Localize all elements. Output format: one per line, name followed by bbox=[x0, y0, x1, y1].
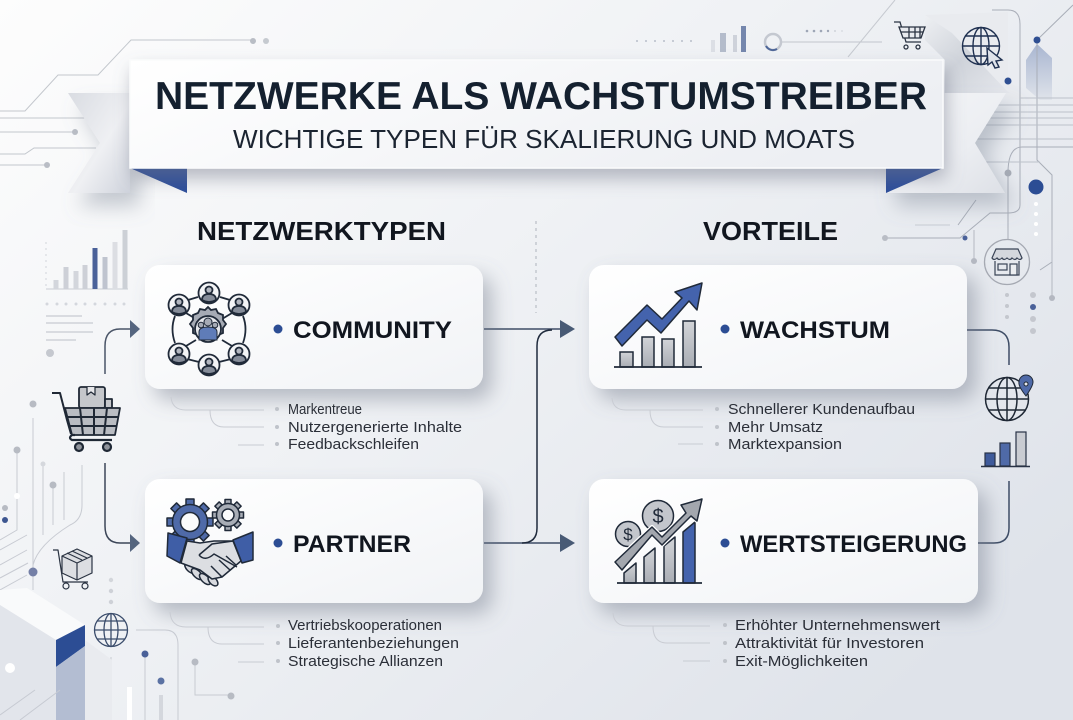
list: community: Markentreue bbox=[288, 401, 362, 418]
arrow: community to wachstum bbox=[484, 320, 575, 338]
list: wertsteigerung: Exit-Möglichkeiten bbox=[735, 653, 868, 670]
icon: bar chart right bbox=[981, 432, 1030, 466]
icon: globe with cursor bbox=[962, 28, 1002, 68]
list: partner: Strategische Allianzen bbox=[288, 653, 443, 670]
icon: store bbox=[984, 240, 1030, 284]
label: community: COMMUNITY bbox=[293, 317, 452, 344]
bullet bbox=[274, 324, 282, 334]
decoration: isometric block bbox=[0, 588, 112, 720]
connector: cart to community bbox=[105, 320, 140, 374]
icon: handshake with gears bbox=[167, 499, 253, 588]
connector: wertsteigerung to chart bbox=[978, 481, 1009, 543]
ribbon: left fold bbox=[68, 93, 130, 193]
decoration: lower-left circuit lines bbox=[0, 400, 234, 720]
list: partner: Lieferantenbeziehungen bbox=[288, 635, 459, 652]
decoration: right-side dots and lines bbox=[971, 230, 1055, 334]
title banner bbox=[130, 60, 943, 168]
list: wachstum: Marktexpansion bbox=[728, 436, 842, 453]
icon: shopping cart top right bbox=[894, 22, 925, 49]
label: wertsteigerung: WERTSTEIGERUNG bbox=[740, 531, 967, 558]
label: partner: PARTNER bbox=[293, 531, 411, 558]
list: community: Feedbackschleifen bbox=[288, 436, 419, 453]
list: wertsteigerung: Attraktivität für Investoren bbox=[735, 635, 924, 652]
list: partner bbox=[170, 612, 459, 670]
icon: growth chart bbox=[614, 283, 702, 367]
panel: wertsteigerung bbox=[589, 479, 978, 603]
title: NETZWERKE ALS WACHSTUMSTREIBER bbox=[155, 75, 927, 118]
panel: wachstum bbox=[589, 265, 967, 389]
icon: community network bbox=[168, 282, 250, 376]
icon: value growth: $ bbox=[623, 525, 633, 544]
bullet bbox=[720, 538, 730, 548]
list: wertsteigerung bbox=[613, 613, 941, 670]
connector: partner to wachstum bbox=[522, 330, 552, 543]
list: wachstum bbox=[612, 398, 915, 453]
centre dotted divider bbox=[535, 221, 537, 313]
ribbon: right fold bbox=[886, 93, 1006, 193]
connector: cart to partner bbox=[105, 463, 140, 552]
list: wertsteigerung: Erhöhter Unternehmenswert bbox=[735, 617, 941, 634]
arrow: partner to wertsteigerung bbox=[484, 534, 575, 552]
icon: value growth: $ bbox=[652, 506, 664, 528]
icon: globe lower left bbox=[94, 614, 128, 646]
decoration: top-middle mini charts bbox=[636, 0, 895, 57]
bullet bbox=[274, 538, 282, 548]
list: community: Nutzergenerierte Inhalte bbox=[288, 419, 462, 436]
bullet bbox=[720, 324, 730, 334]
list: community bbox=[171, 397, 462, 453]
decoration: top-left circuit lines bbox=[0, 38, 269, 168]
list: wachstum: Schnellerer Kundenaufbau bbox=[728, 401, 915, 418]
icon: small cart with parcel bbox=[53, 549, 92, 589]
icon: globe with location pin bbox=[986, 375, 1033, 420]
subtitle: WICHTIGE TYPEN FÜR SKALIERUNG UND MOATS bbox=[233, 124, 855, 154]
label: wachstum: WACHSTUM bbox=[740, 317, 890, 344]
heading: Netzwerktypen: NETZWERKTYPEN bbox=[197, 216, 446, 246]
ribbon: blue corner right bbox=[886, 168, 943, 193]
panel: partner bbox=[145, 479, 483, 603]
list: partner: Vertriebskooperationen bbox=[288, 617, 442, 634]
icon: shopping cart with parcel bbox=[52, 387, 120, 451]
ribbon: blue corner left bbox=[130, 168, 187, 193]
panel: community bbox=[145, 265, 483, 389]
icon: value growth bbox=[615, 499, 702, 583]
decoration: top-right folded shapes and circuits bbox=[882, 5, 1073, 270]
list: wachstum: Mehr Umsatz bbox=[728, 419, 823, 436]
connector: wachstum to globe bbox=[966, 330, 1009, 365]
heading: Vorteile: VORTEILE bbox=[703, 216, 838, 246]
decoration: upper-left bar chart bbox=[46, 230, 128, 357]
